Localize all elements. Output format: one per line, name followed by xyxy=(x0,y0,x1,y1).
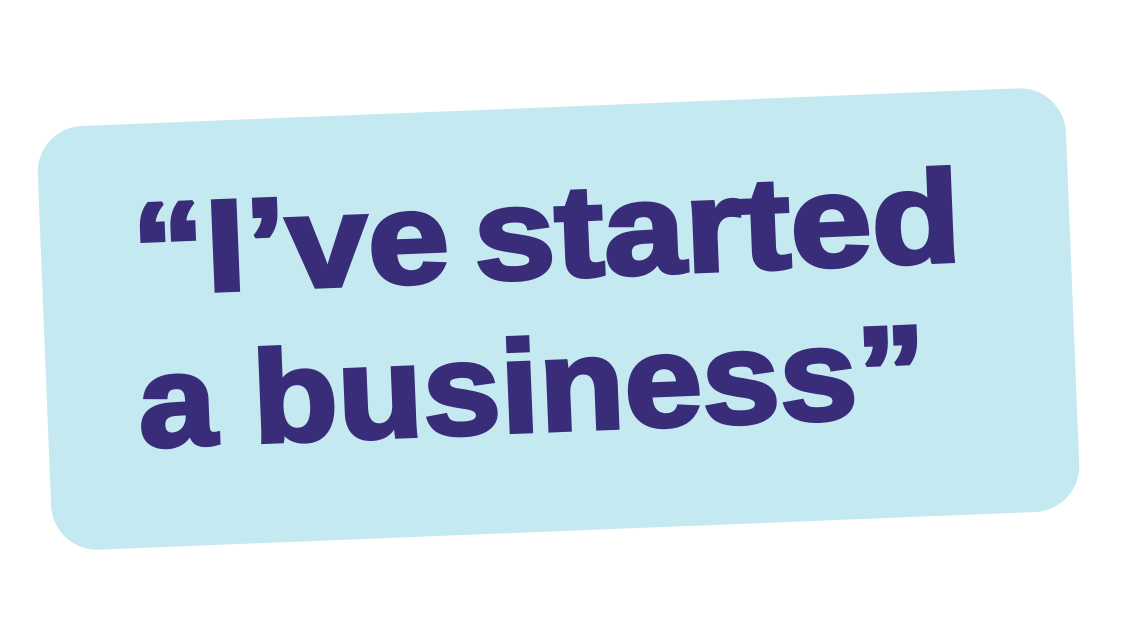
heading line 2: a business” xyxy=(135,297,929,475)
panel: tilted light blue rounded card xyxy=(36,87,1081,551)
heading line 1: “I’ve started xyxy=(129,143,963,322)
